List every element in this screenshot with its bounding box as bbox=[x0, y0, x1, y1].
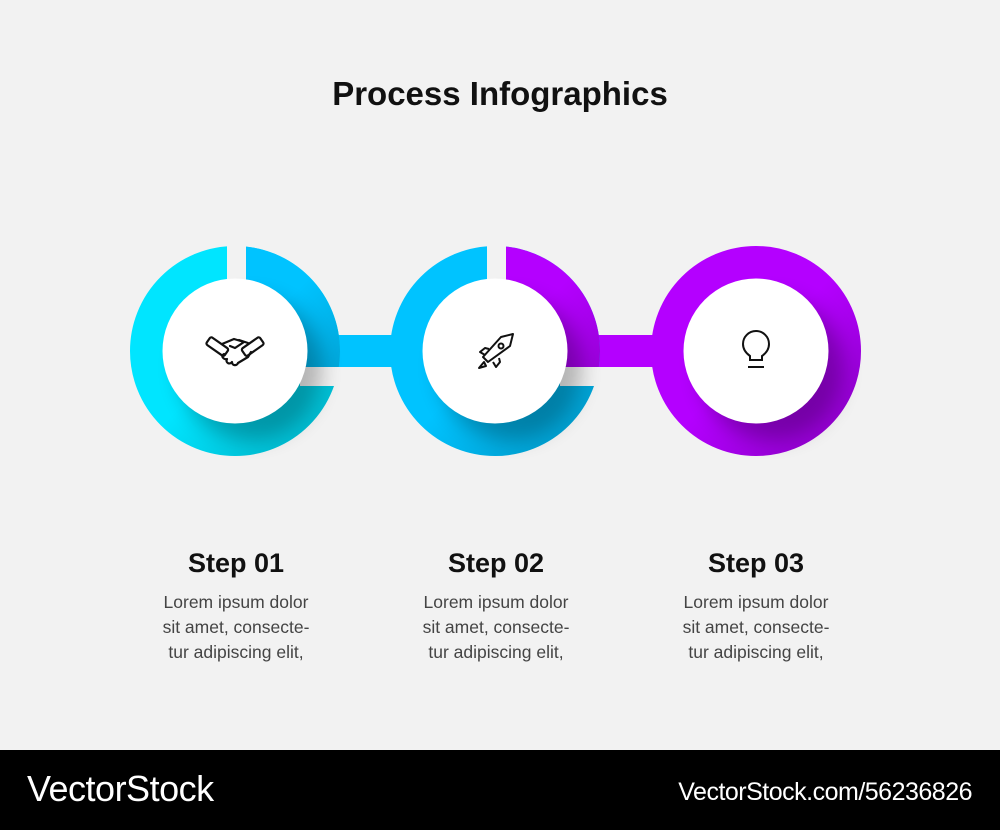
footer url: VectorStock.com/56236826 bbox=[678, 778, 972, 806]
title: Process Infographics bbox=[332, 75, 668, 112]
footer logo: VectorStock bbox=[27, 768, 214, 809]
connector 1 bbox=[330, 335, 400, 367]
step 2 text: tur adipiscing elit, bbox=[428, 642, 564, 662]
icon: handshake bbox=[206, 337, 264, 365]
step 3 ring bbox=[651, 246, 861, 456]
diagram bbox=[130, 246, 861, 456]
step 3 text bbox=[683, 592, 829, 662]
step 3 text: Lorem ipsum dolor bbox=[684, 592, 828, 612]
icon: light bulb bbox=[743, 331, 769, 367]
step 2 text: sit amet, consecte- bbox=[423, 617, 569, 637]
step 3 text: tur adipiscing elit, bbox=[688, 642, 824, 662]
step 2 ring bbox=[390, 240, 605, 456]
step 1 text: tur adipiscing elit, bbox=[168, 642, 304, 662]
icon: rocket bbox=[479, 334, 513, 368]
step 2 text bbox=[423, 592, 569, 662]
step 1 heading: Step 01 bbox=[188, 548, 284, 578]
step 1 text: sit amet, consecte- bbox=[163, 617, 309, 637]
connector 2 bbox=[590, 335, 662, 367]
step 1 text: Lorem ipsum dolor bbox=[164, 592, 308, 612]
step 2 text: Lorem ipsum dolor bbox=[424, 592, 568, 612]
footer bbox=[0, 750, 1000, 830]
step 1 text bbox=[163, 592, 309, 662]
step 1 ring bbox=[130, 240, 345, 456]
step 3 text: sit amet, consecte- bbox=[683, 617, 829, 637]
step 3 heading: Step 03 bbox=[708, 548, 804, 578]
step 2 heading: Step 02 bbox=[448, 548, 544, 578]
white circles with shadow bbox=[162, 278, 843, 440]
